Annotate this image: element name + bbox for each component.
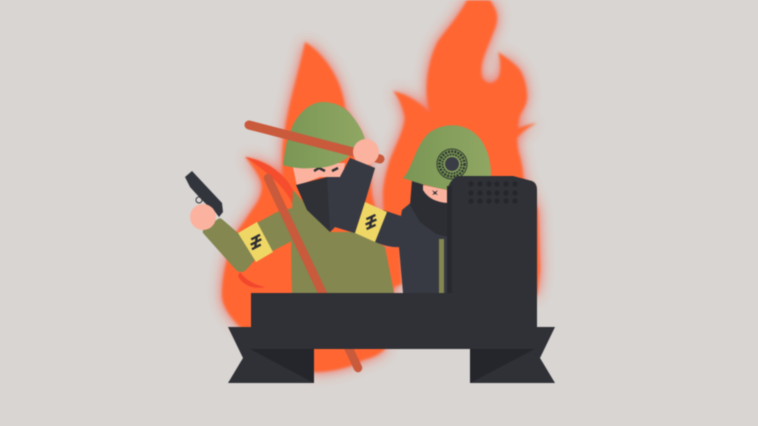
baton — [249, 125, 380, 159]
ribbon right tail — [470, 327, 555, 383]
soldier 2 face — [423, 185, 448, 203]
soldier 2 — [399, 125, 491, 293]
ribbon banner — [228, 293, 555, 383]
helmet emblem — [437, 149, 467, 179]
soldier 1 — [185, 102, 404, 368]
riot shield — [447, 176, 537, 295]
soldier 2 mask — [410, 180, 448, 237]
shield edge — [447, 186, 452, 294]
soldier 1 torso — [291, 190, 394, 293]
sleeve extending to soldier 2 — [373, 210, 404, 247]
ribbon main band — [228, 293, 555, 349]
armband symbol — [248, 235, 264, 249]
armband symbol — [363, 215, 379, 229]
soldier 1 arm with pistol side — [203, 208, 292, 272]
pistol — [185, 171, 223, 217]
ribbon right fold — [470, 349, 535, 383]
shield vents — [468, 181, 518, 204]
ribbon left tail — [228, 327, 314, 383]
soldier 2 helmet — [403, 125, 491, 190]
armband left — [238, 222, 273, 262]
soldier 2 eye — [432, 190, 438, 195]
second baton — [268, 178, 358, 368]
soldier 2 strap — [439, 239, 444, 293]
soldier 1 eyes — [314, 168, 338, 171]
raised hand — [353, 139, 379, 165]
trigger guard — [196, 197, 202, 203]
pistol hand — [190, 204, 216, 230]
ribbon left fold — [250, 349, 314, 383]
soldier 1 mask and raised sleeve — [296, 158, 375, 233]
armband right — [355, 202, 387, 242]
flames glow — [222, 0, 540, 372]
flames — [222, 0, 540, 372]
soldier 1 helmet — [283, 102, 365, 168]
left flame red accents — [238, 157, 293, 288]
soldier 1 face — [292, 163, 345, 186]
soldier 2 body — [399, 195, 448, 293]
